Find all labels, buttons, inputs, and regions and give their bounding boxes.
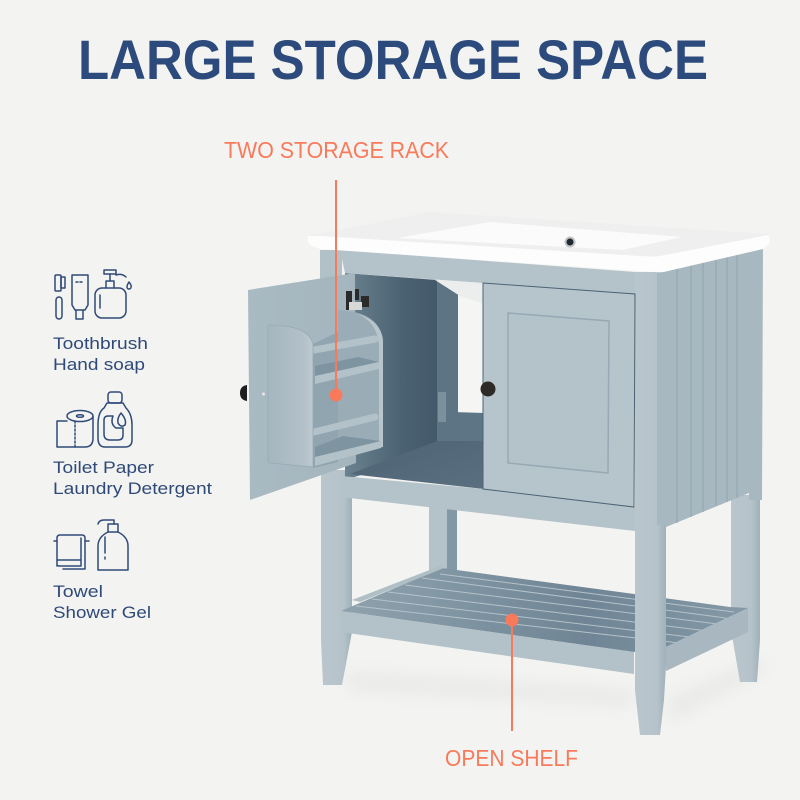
- rack side panel: [268, 325, 313, 467]
- label: toilet paper, laundry detergent: [53, 458, 212, 498]
- door panel: [508, 313, 609, 473]
- right door: [480, 283, 635, 507]
- cabinet interior: [345, 273, 484, 489]
- door knob: [480, 382, 496, 396]
- upper shelf: [315, 357, 379, 376]
- counter top with basin: [308, 212, 770, 272]
- label: toilet paper, laundry detergent: Laundry Detergent: [53, 479, 212, 498]
- icon: toilet paper and detergent: [57, 392, 132, 447]
- label: toothbrush, hand soap: Toothbrush: [53, 334, 148, 353]
- icon: toothbrush, toothpaste and soap pump: [55, 270, 131, 319]
- lower rod: [314, 417, 375, 432]
- floor shadow: [345, 660, 770, 722]
- upper rod: [314, 339, 375, 350]
- back left post and front-left leg: [320, 250, 352, 685]
- label: towel, shower gel: Towel: [53, 582, 103, 601]
- lower shelf: [315, 436, 381, 457]
- back right leg: [731, 495, 760, 682]
- callout: open shelf: [445, 614, 578, 771]
- lower rail: [341, 476, 635, 531]
- two storage rack: [268, 310, 383, 468]
- icon: towel and shower gel: [54, 520, 128, 570]
- vanity cabinet illustration: [240, 212, 770, 735]
- front right post: [635, 272, 666, 735]
- label: towel, shower gel: Shower Gel: [53, 603, 151, 622]
- apron: [340, 250, 635, 294]
- side panel with beadboard: [655, 248, 763, 527]
- drain: [564, 236, 576, 248]
- open shelf: [341, 566, 748, 674]
- callout: two storage rack: [224, 137, 450, 402]
- callout: two storage rack: TWO STORAGE RACK: [224, 137, 450, 163]
- label: towel, shower gel: [53, 582, 151, 622]
- label: toothbrush, hand soap: Hand soap: [53, 355, 145, 374]
- title: LARGE STORAGE SPACE: [78, 28, 708, 91]
- label: toothbrush, hand soap: [53, 334, 148, 374]
- hinge: [346, 289, 369, 310]
- outer door knob: [240, 385, 247, 401]
- callout: open shelf: OPEN SHELF: [445, 745, 578, 771]
- label: toilet paper, laundry detergent: Toilet Paper: [53, 458, 154, 477]
- back centre leg: [429, 505, 457, 571]
- open left door: [240, 273, 356, 500]
